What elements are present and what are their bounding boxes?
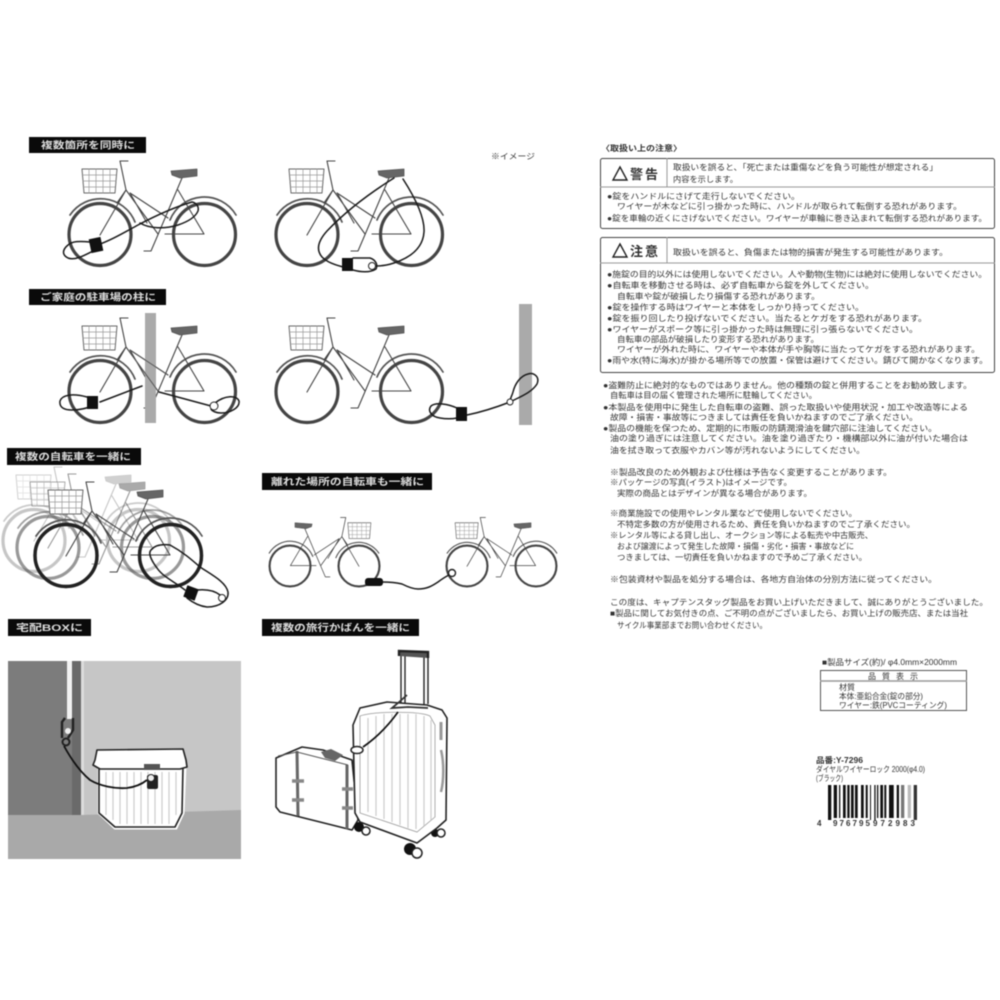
barcode: 976795 [833, 819, 871, 828]
panel: caution: ●自転車を移動させる時は、必ず自転車から錠を外してください。 [607, 280, 874, 290]
panel: caution: 自転車や錠が破損したり損傷する恐れがあります。 [617, 291, 820, 301]
icon: caution triangle [613, 244, 627, 257]
label: delivery box: 宅配BOXに [16, 622, 83, 634]
heading: handling precautions: 〈取扱い上の注意〉 [601, 143, 682, 153]
label: multiple travel bags together [262, 619, 419, 636]
icon: warning triangle [613, 167, 627, 180]
text block: product notes: ※製品改良のため外観および仕様は予告なく変更することがあります。 [610, 467, 892, 477]
panel: caution [600, 237, 995, 372]
text block: usage notes: 故障・損害・事故等につきましては責任を負いかねますのでご了承ください。 [610, 412, 918, 422]
label: home parking pillar: ご家庭の駐車場の柱に [40, 292, 156, 304]
panel: warning: 取扱いを誤ると、「死亡または重傷などを負う可能性が想定される」 [673, 162, 938, 172]
panel: warning: ●錠をハンドルにさげて走行しないでください。 [607, 191, 800, 201]
panel: caution: ●施錠の目的以外には使用しないでください。人や動物(生物)には絶対に使用しないでください。 [607, 269, 987, 279]
label: multiple points at once [29, 137, 146, 153]
label: multiple bicycles together [7, 448, 141, 465]
text block: thanks and contact: ■製品に関してお気付きの点、ご不明の点がございましたら、お買い上げの販売店、または当社 [610, 608, 968, 618]
label: multiple travel bags together: 複数の旅行かばんを一緒に [271, 622, 410, 634]
panel: caution: ●錠を振り回したり投げないでください。当たるとケガをする恐れがあります。 [607, 313, 927, 323]
panel: quality labeling: 品質表示 [868, 671, 918, 681]
text block: rental notes: 不特定多数の方が使用されるため、責任を負いかねますのでご了承ください。 [617, 519, 915, 529]
barcode: 972983 [873, 819, 916, 828]
text block: product notes [610, 467, 892, 498]
illustration: suitcases locked together [276, 651, 447, 858]
panel: quality labeling [820, 670, 967, 710]
label: bicycle at a separate place: 離れた場所の自転車も一緒に [271, 476, 424, 488]
text block: usage notes: 自転車は目の届く管理された場所に駐輪してください。 [610, 390, 817, 400]
text block: rental notes: つきましては、一切責任を負いかねますので予めご了承ください。 [617, 552, 867, 562]
text block: usage notes: ●本製品を使用中に発生した自転車の盗難、誤った取扱いや使用状況・加工や改造等による [603, 402, 968, 412]
handle [401, 656, 428, 704]
small trunk [276, 747, 358, 830]
text block: usage notes [603, 380, 972, 455]
label: multiple bicycles together: 複数の自転車を一緒に [15, 451, 131, 463]
text block: rental notes [610, 508, 915, 562]
panel: warning: 内容を示します。 [673, 174, 738, 184]
text block: usage notes: 油を拭き取って衣服やカバン等が汚れないようにしてください。 [610, 445, 865, 455]
illustration: delivery box locked to pipe [8, 661, 241, 859]
panel: caution: 自転車の部品が破損したり変形する恐れがあります。 [617, 334, 819, 344]
text: product size: ■製品サイズ(約)/ φ4.0mm×2000mm [822, 657, 957, 667]
label: home parking pillar [29, 289, 166, 305]
barcode: 4 [817, 819, 822, 828]
panel: quality labeling: 材質 [839, 682, 855, 692]
text block: product notes: 実際の商品とはデザインが異なる場合があります。 [617, 488, 812, 498]
text: product number and name: (ブラック) [816, 773, 843, 783]
text: product number and name: ダイヤルワイヤーロック 2000(φ4.0) [816, 764, 925, 774]
text: product number and name: 品番:Y-7296 [816, 755, 864, 765]
panel: warning [600, 158, 995, 228]
panel: quality labeling: 本体:亜鉛合金(錠の部分) [839, 691, 923, 701]
text: product number and name [816, 755, 925, 783]
text block: disposal note: ※包装資材や製品を処分する場合は、各地方自治体の分別方法に従ってください。 [610, 574, 937, 584]
text block: usage notes: ●盗難防止に絶対的なものではありません。他の種類の錠と併用することをお勧め致します。 [603, 380, 972, 390]
panel: caution: 取扱いを誤ると、負傷または物的損害が発生する可能性があります。 [673, 247, 948, 257]
illustration: two bicycles linked by wire [269, 517, 557, 589]
label: bicycle at a separate place [262, 473, 432, 490]
text block: rental notes: ※商業施設での使用やレンタル業などで使用しないでください。 [610, 508, 857, 518]
panel: warning: ワイヤーが木などに引っ掛かった時に、ハンドルが取られて転倒する恐れがあります。 [617, 201, 962, 211]
panel: caution: 注意 [630, 244, 658, 259]
note: image only: ※イメージ [491, 152, 535, 161]
large suitcase [353, 702, 447, 843]
illustration: bike locked around pillar [60, 313, 239, 423]
text block: product notes: ※パッケージの写真(イラスト)はイメージです。 [610, 477, 792, 487]
text block: thanks and contact: サイクル事業部までお問い合わせください。 [617, 620, 767, 630]
panel: caution: ●ワイヤーがスポーク等に引っ掛かった時は無理に引っ張らないでください。 [607, 324, 918, 334]
text block: thanks and contact: この度は、キャプテンスタッグ製品をお買い上げいただきまして、誠にありがとうございました。 [610, 597, 988, 607]
panel: warning: 警告 [630, 167, 658, 182]
illustration: bike locked through frame and wheel [64, 161, 236, 266]
illustration: bike locked with seat loop [276, 161, 443, 272]
panel: caution: ●雨や水(特に海水)が掛かる場所等での放置・保管は避けてください。錆びて開かなくなります。 [607, 355, 988, 365]
illustration: several bicycles locked together [3, 467, 228, 607]
wheels [354, 822, 445, 858]
label: multiple points at once: 複数箇所を同時に [41, 140, 135, 152]
label: delivery box [8, 619, 91, 636]
barcode [817, 785, 917, 828]
text block: rental notes: および譲渡によって発生した故障・損傷・劣化・損害・事故などに [617, 541, 854, 551]
text block: usage notes: 油の塗り過ぎには注意してください。油を塗り過ぎたり・機構部以外に油が付いた場合は [610, 433, 968, 443]
panel: caution: ●錠を操作する時はワイヤーと本体をしっかり持ってください。 [607, 302, 864, 312]
text block: rental notes: ※レンタル等による貸し出し、オークション等による転売や中古販売、 [610, 530, 873, 540]
panel: warning: ●錠を車輪の近くにさげないでください。ワイヤーが車輪に巻き込まれて転倒する恐れがあります。 [607, 213, 987, 223]
delivery box body [99, 766, 185, 828]
illustration: bike chained to distant pillar [276, 304, 538, 425]
text block: usage notes: ●製品の機能を保つため、定期的に市販の防錆潤滑油を鍵穴部に注油してください。 [603, 423, 937, 433]
panel: caution: ワイヤーが外れた時に、ワイヤーや本体が手や胸等に当たってケガをする恐れがあります。 [617, 344, 980, 354]
panel: quality labeling: ワイヤー:鉄(PVCコーティング) [839, 700, 947, 710]
text block: thanks and contact [610, 597, 988, 630]
